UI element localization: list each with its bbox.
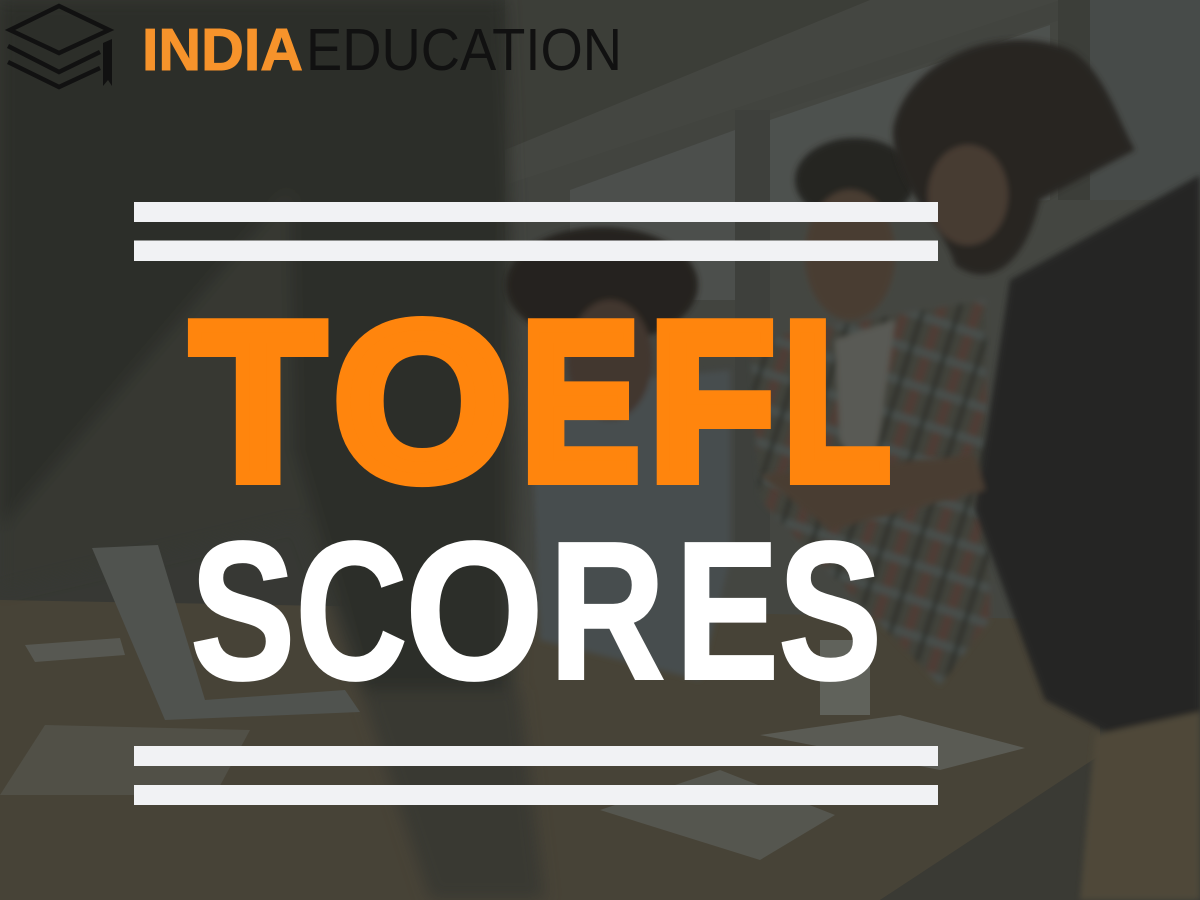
title: TOEFL: L [784,279,890,526]
subtitle: SCORES: O [405,501,544,720]
icon: graduation cap and books [8,6,112,87]
woman right [760,40,1200,900]
subtitle: SCORES: E [676,502,779,721]
title: TOEFL: T [192,278,324,526]
title: TOEFL: E [522,279,639,526]
student centre [750,138,990,685]
logo wordmark: EDUCATION [306,17,622,83]
subtitle: SCORES [190,501,882,721]
subtitle: SCORES: R [549,501,665,720]
subtitle: SCORES: C [296,502,407,721]
dark foreground figure [0,0,545,900]
title: TOEFL: O [334,277,511,525]
title: TOEFL: F [650,278,774,526]
student left [506,227,730,680]
logo [8,6,622,87]
logo wordmark [142,17,622,83]
logo wordmark: INDIA [142,17,303,83]
title: TOEFL [192,277,890,526]
subtitle: SCORES: S [190,501,295,720]
laptop and papers [92,545,360,720]
subtitle: SCORES: S [778,502,882,721]
bottom double rule [134,746,938,805]
top double rule [134,202,938,261]
